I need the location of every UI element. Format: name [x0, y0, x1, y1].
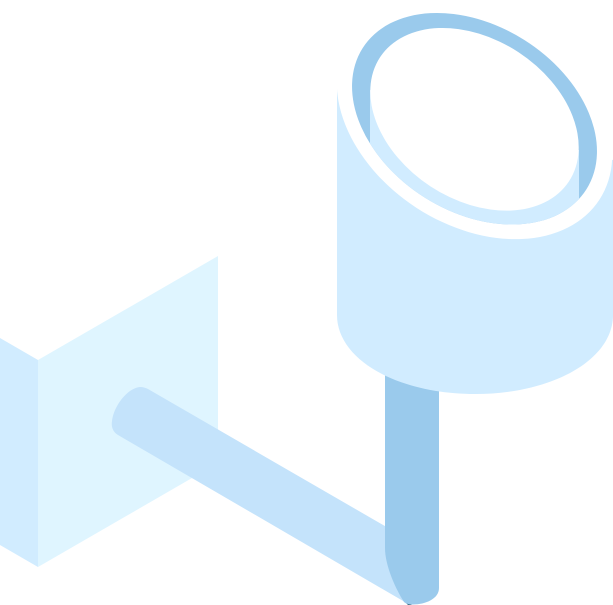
- vertical pole: [385, 360, 439, 604]
- wall plate: side face: [0, 338, 38, 567]
- wall plate: front face: [38, 256, 218, 567]
- opening: [336, 0, 613, 248]
- white rim: [292, 0, 613, 289]
- ring: inner back wall: [313, 0, 613, 268]
- horizontal arm: [112, 387, 410, 605]
- lamp shade: [337, 13, 613, 394]
- dark sliver under pole: [405, 602, 412, 605]
- ring: inner front wall: [370, 90, 579, 224]
- shade body: [337, 84, 613, 394]
